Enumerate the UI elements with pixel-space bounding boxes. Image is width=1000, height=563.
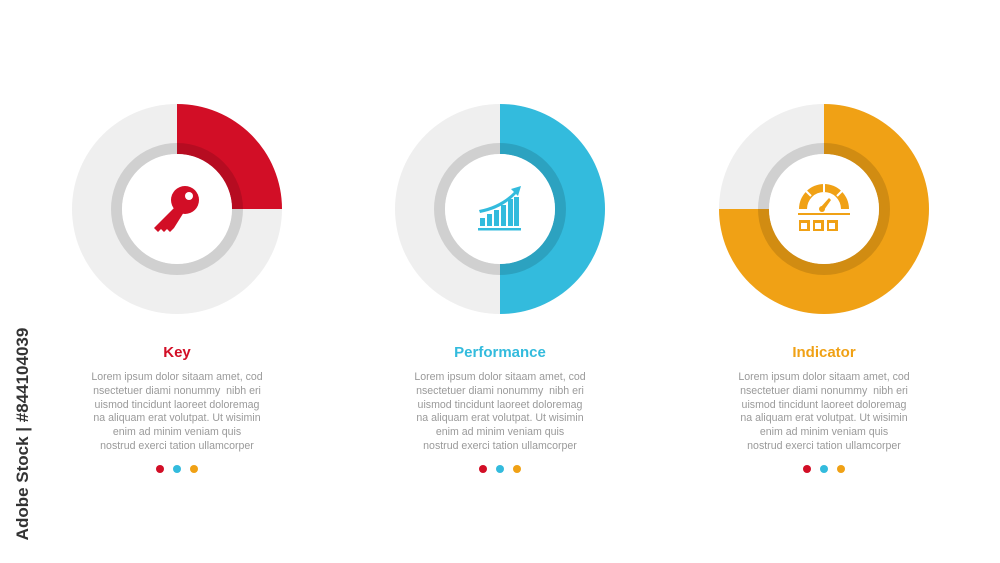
text block: performance: nostrud exerci tation ullamcorper	[423, 440, 577, 452]
dots: performance	[479, 465, 521, 473]
icon: gauge	[798, 184, 850, 231]
text block: indicator: Lorem ipsum dolor sitaam amet, cod	[738, 371, 910, 383]
text block: performance: enim ad minim veniam quis	[436, 426, 564, 438]
text block: performance	[414, 344, 586, 452]
text block: key: nsectetuer diami nonummy nibh eri	[93, 385, 261, 397]
text block: key	[91, 344, 263, 452]
text block: key: nostrud exerci tation ullamcorper	[100, 440, 254, 452]
text block: performance: nsectetuer diami nonummy nibh eri	[416, 385, 584, 397]
watermark vertical text: Adobe Stock | #844104039	[13, 328, 32, 540]
dots: indicator	[803, 465, 845, 473]
text block: performance: Lorem ipsum dolor sitaam amet, cod	[414, 371, 586, 383]
icon: growth chart	[478, 186, 521, 230]
text block: key: uismod tincidunt laoreet doloremag	[95, 399, 259, 411]
chart: performance	[395, 104, 605, 314]
text block: indicator	[738, 344, 910, 452]
chart: key	[72, 104, 282, 314]
dots: key	[156, 465, 198, 473]
text block: performance: na aliquam erat volutpat. Ut wisimin	[416, 412, 584, 424]
text block: key: na aliquam erat volutpat. Ut wisimin	[93, 412, 261, 424]
text block: performance: Performance	[454, 344, 546, 361]
text block: key: Lorem ipsum dolor sitaam amet, cod	[91, 371, 263, 383]
text block: key: Key	[163, 344, 191, 361]
text block: indicator: enim ad minim veniam quis	[760, 426, 888, 438]
text block: indicator: uismod tincidunt laoreet doloremag	[742, 399, 906, 411]
text block: indicator: na aliquam erat volutpat. Ut wisimin	[740, 412, 908, 424]
text block: indicator: nsectetuer diami nonummy nibh eri	[740, 385, 908, 397]
chart: indicator	[719, 104, 929, 314]
text block: performance: uismod tincidunt laoreet doloremag	[418, 399, 582, 411]
icon: key	[154, 186, 199, 232]
text block: indicator: nostrud exerci tation ullamcorper	[747, 440, 901, 452]
text block: indicator: Indicator	[792, 344, 856, 361]
text block: key: enim ad minim veniam quis	[113, 426, 241, 438]
